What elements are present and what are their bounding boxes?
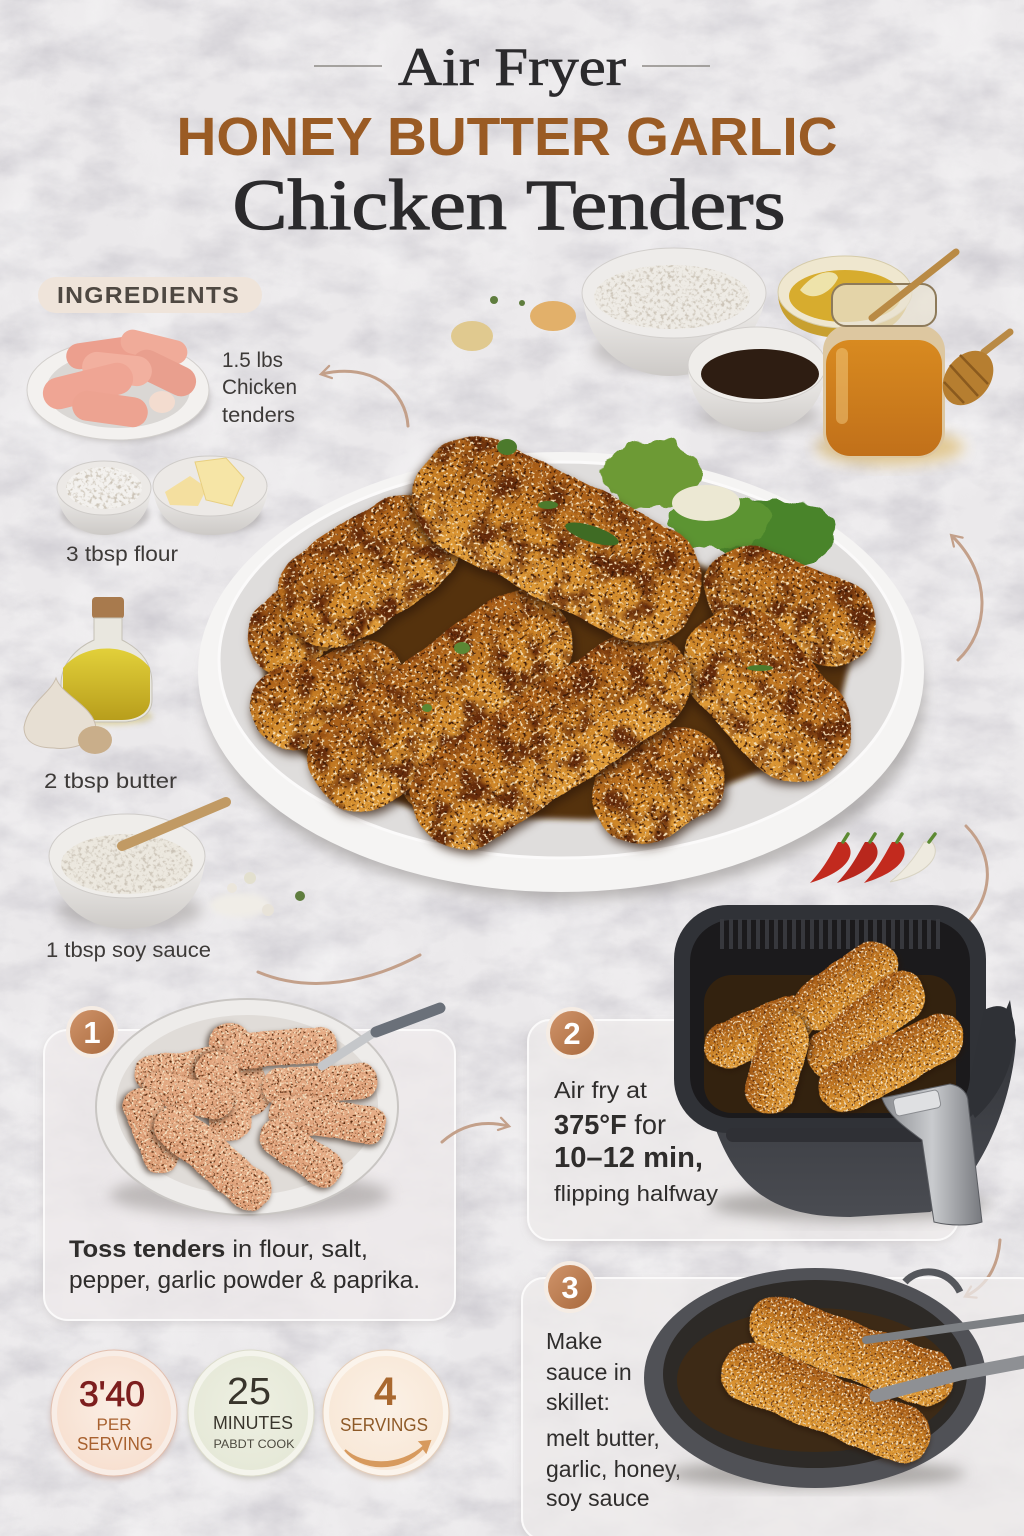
honey dipper	[932, 332, 1010, 415]
label: butter: 2 tbsp butter	[44, 770, 177, 793]
label: chicken tenders	[222, 349, 297, 427]
step 3 panel	[522, 1261, 1024, 1536]
icon: bowl of coated tenders	[96, 999, 440, 1220]
tenders in fryer	[697, 931, 973, 1121]
tongs	[866, 1318, 1024, 1396]
garlic cloves	[451, 296, 576, 351]
step 1 text: Toss tenders in flour, salt,	[69, 1236, 368, 1263]
plate	[198, 452, 925, 900]
step 2 text: Air fry at	[554, 1077, 648, 1103]
icon: raw chicken plate	[27, 327, 210, 442]
soy sauce bowl	[688, 327, 826, 432]
garnish: lettuce	[602, 440, 836, 568]
minutes badge: MINUTES	[213, 1413, 293, 1433]
badge 1	[66, 1006, 118, 1058]
minutes badge: PABDT COOK	[214, 1437, 294, 1451]
badge 3	[544, 1261, 596, 1313]
minutes badge: 25	[227, 1371, 271, 1413]
honey dish	[778, 256, 912, 338]
icon: flour and butter bowls	[57, 456, 268, 535]
flour bowl	[582, 248, 766, 376]
calories badge: PER	[97, 1415, 131, 1434]
honey jar with dipper	[816, 252, 964, 465]
icon: oil bottle and garlic	[24, 597, 152, 754]
arrow: right side curve up	[952, 536, 982, 660]
step 3 text	[546, 1328, 681, 1511]
icon: chili peppers	[810, 834, 935, 883]
badge 3: 3	[561, 1270, 579, 1305]
decorative swoosh arrow	[258, 955, 420, 983]
step 3 text: sauce in	[546, 1359, 632, 1385]
step 3 text: melt butter,	[546, 1425, 660, 1451]
label: chicken tenders: tenders	[222, 404, 295, 427]
arrow: step 1 to step 2	[442, 1123, 508, 1142]
arrow: to chicken	[322, 371, 408, 426]
servings badge: SERVINGS	[340, 1415, 428, 1435]
title: Air Fryer	[398, 37, 626, 97]
badge 2: 2	[563, 1016, 581, 1051]
icon: bowl with spoon	[49, 802, 305, 930]
step 1 panel	[44, 999, 455, 1320]
step 2 panel	[528, 1007, 958, 1240]
badge 1: 1	[83, 1015, 101, 1050]
main plate of tenders	[198, 415, 925, 900]
title: HONEY BUTTER GARLIC	[176, 107, 838, 167]
label: chicken tenders: Chicken	[222, 376, 297, 399]
calories badge: SERVING	[77, 1434, 153, 1454]
step 3 text: soy sauce	[546, 1485, 650, 1511]
step 1 text: pepper, garlic powder & paprika.	[69, 1267, 420, 1294]
servings badge: 4	[374, 1370, 397, 1414]
arrow: to step 3	[966, 1240, 1000, 1296]
step 2 text: flipping halfway	[554, 1181, 718, 1206]
step 2 text	[554, 1077, 718, 1206]
icon: air fryer	[674, 905, 1016, 1225]
calories badge: 3'40	[79, 1375, 145, 1414]
label: soy sauce: 1 tbsp soy sauce	[46, 939, 211, 962]
step 2 text: 375°F for	[554, 1109, 666, 1140]
step 3 text: skillet:	[546, 1389, 610, 1415]
top right ingredients	[451, 248, 1010, 465]
calories badge	[51, 1350, 177, 1479]
pile shadow	[262, 495, 855, 820]
step 3 text: garlic, honey,	[546, 1456, 681, 1482]
ingredients heading	[38, 277, 262, 313]
servings badge	[323, 1350, 449, 1479]
step 3 text: Make	[546, 1328, 602, 1354]
icon: skillet with tenders and tongs	[644, 1268, 1024, 1488]
step 2 text: 10–12 min,	[554, 1142, 703, 1174]
label: chicken tenders: 1.5 lbs	[222, 349, 283, 372]
minutes badge	[188, 1350, 314, 1479]
fried tenders	[230, 415, 890, 869]
title: Chicken Tenders	[232, 165, 786, 245]
badge 2	[546, 1007, 598, 1059]
stat badges	[51, 1350, 449, 1479]
fryer handle	[882, 1084, 982, 1225]
ingredients heading: INGREDIENTS	[57, 282, 240, 308]
arrow: down to air fryer	[956, 826, 987, 934]
label: flour: 3 tbsp flour	[66, 543, 178, 566]
step 1 text	[69, 1236, 420, 1294]
title	[176, 37, 838, 245]
